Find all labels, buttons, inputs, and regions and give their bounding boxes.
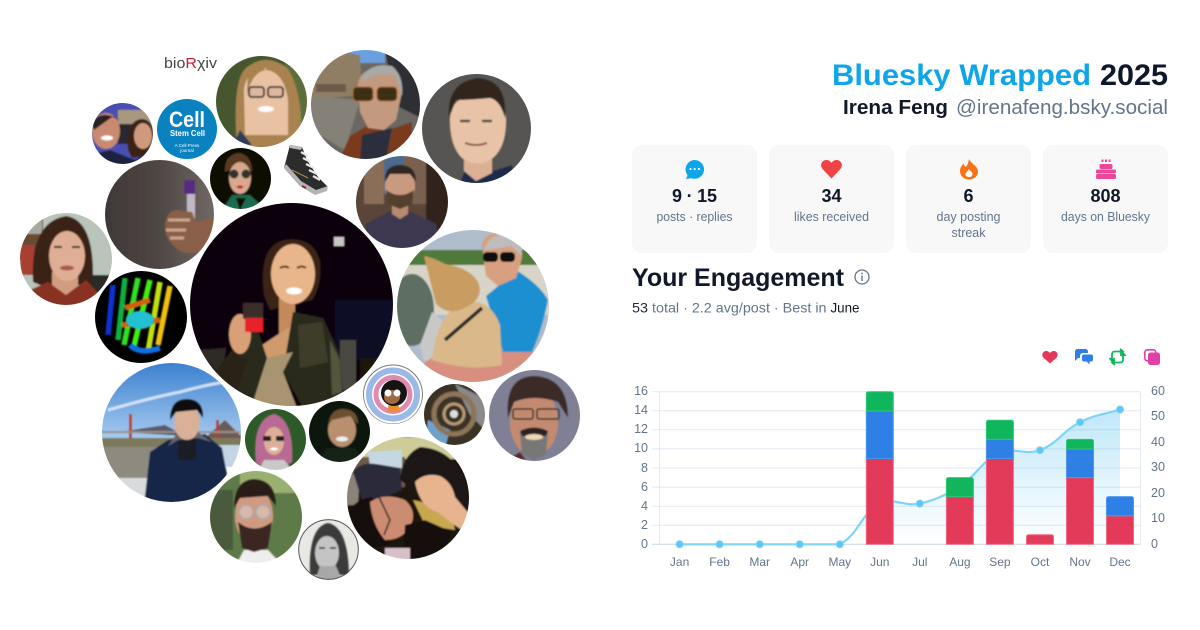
avatar: man with glasses and grey beard bbox=[489, 370, 580, 461]
avatar: man at Golden Gate Bridge bbox=[102, 363, 241, 502]
bar: November bbox=[1066, 439, 1094, 544]
avatar: main portrait with red drink bbox=[190, 203, 393, 406]
user name and handle bbox=[843, 97, 1168, 119]
avatar: woman with glasses bbox=[216, 56, 307, 147]
avatar: couple selfie bbox=[92, 103, 153, 164]
cumulative area fill bbox=[840, 410, 1120, 544]
icon: speech bubble bbox=[686, 160, 704, 179]
right axis labels: 60 bbox=[1151, 384, 1165, 398]
month labels: Sep bbox=[989, 555, 1011, 569]
right axis labels: 30 bbox=[1151, 460, 1165, 474]
left axis labels: 0 bbox=[641, 537, 648, 551]
avatar: Cell Stem Cell journal logo: journal bbox=[179, 148, 194, 153]
logo: bioRxiv: bioRχiv bbox=[164, 55, 218, 72]
month labels: Jun bbox=[870, 555, 889, 569]
heading: Your Engagement: Your Engagement bbox=[632, 264, 845, 292]
month labels bbox=[670, 555, 1131, 569]
stat card: posting streak: streak bbox=[952, 225, 986, 240]
icon: flame bbox=[960, 159, 978, 180]
month labels: May bbox=[828, 555, 851, 569]
right axis labels: 50 bbox=[1151, 409, 1165, 423]
stat card: likes received: 34 bbox=[821, 186, 842, 206]
right axis labels: 20 bbox=[1151, 486, 1165, 500]
icon: likes heart bbox=[1042, 351, 1058, 364]
left axis labels: 4 bbox=[641, 499, 648, 513]
month labels: Apr bbox=[790, 555, 809, 569]
stat card: days on Bluesky bbox=[1043, 145, 1168, 253]
engagement summary: total · 2.2 avg/post · Best in bbox=[652, 300, 826, 316]
stat card: posting streak: 6 bbox=[963, 186, 974, 206]
title: Bluesky Wrapped bbox=[832, 59, 1091, 92]
avatar: Cell Stem Cell journal logo: Stem Cell bbox=[170, 128, 205, 138]
avatar: man with clear glasses and beard bbox=[210, 471, 302, 563]
avatar: smiling woman in red top bbox=[20, 213, 112, 305]
month labels: Jul bbox=[912, 555, 927, 569]
month labels: Oct bbox=[1031, 555, 1050, 569]
month labels: Aug bbox=[949, 555, 971, 569]
avatar: high-top sneaker bbox=[284, 145, 328, 195]
month labels: Nov bbox=[1069, 555, 1091, 569]
stat card: likes received bbox=[769, 145, 894, 253]
avatar: man on grey background bbox=[422, 74, 531, 183]
user name and handle: @irenafeng.bsky.social bbox=[956, 97, 1168, 119]
right axis labels bbox=[1151, 384, 1165, 551]
stat card: posts and replies: posts · replies bbox=[656, 209, 733, 224]
avatar: Cell Stem Cell journal logo: Cell bbox=[169, 107, 205, 132]
left axis labels: 8 bbox=[641, 461, 648, 475]
left axis labels bbox=[634, 384, 648, 551]
stat card: likes received: likes received bbox=[794, 209, 869, 224]
avatar: woman with pink hair bbox=[245, 409, 306, 470]
avatar cluster bbox=[20, 50, 580, 580]
right axis labels: 0 bbox=[1151, 537, 1158, 551]
stat card: posts and replies: 9 · 15 bbox=[672, 186, 717, 206]
chart legend icons bbox=[1042, 349, 1160, 365]
left axis labels: 12 bbox=[634, 422, 648, 436]
avatar: man holding a dog bbox=[397, 230, 549, 382]
left axis labels: 2 bbox=[641, 518, 648, 532]
avatar: spiral staircase bbox=[424, 384, 485, 445]
title: 2025 bbox=[1100, 59, 1168, 92]
stat card: posts and replies bbox=[632, 145, 757, 253]
month labels: Dec bbox=[1109, 555, 1131, 569]
line points bbox=[676, 406, 1124, 548]
bar: June bbox=[866, 392, 893, 544]
stat card: posting streak: day posting bbox=[936, 209, 1000, 224]
month labels: Feb bbox=[709, 555, 730, 569]
engagement summary: June bbox=[830, 300, 860, 316]
bar: August bbox=[946, 478, 973, 544]
cumulative line bbox=[680, 410, 1120, 544]
stat card: days on Bluesky: days on Bluesky bbox=[1061, 209, 1150, 224]
avatar: black and white portrait bbox=[298, 519, 359, 580]
right axis labels: 40 bbox=[1151, 435, 1165, 449]
avatar: bearded man in patterned shirt bbox=[356, 156, 448, 248]
bar: December bbox=[1106, 497, 1134, 544]
gridlines and axes bbox=[652, 392, 1140, 544]
icon: replies speech bubbles bbox=[1075, 349, 1093, 364]
icon: birthday cake bbox=[1096, 160, 1116, 179]
avatar: man with amber sunglasses bbox=[311, 50, 420, 159]
engagement chart bbox=[634, 384, 1165, 569]
avatar: protein structure bbox=[95, 271, 187, 363]
month labels: Jan bbox=[670, 555, 689, 569]
month labels: Mar bbox=[749, 555, 770, 569]
bar: September bbox=[986, 420, 1013, 544]
avatar: Cell Stem Cell journal logo: A Cell Press bbox=[175, 143, 200, 148]
icon: reposts arrows bbox=[1110, 349, 1126, 365]
left axis labels: 6 bbox=[641, 480, 648, 494]
bar: October bbox=[1026, 535, 1054, 544]
left axis labels: 14 bbox=[634, 403, 648, 417]
avatar: hand holding a tube bbox=[105, 160, 214, 269]
avatar: smiling man on dark background bbox=[309, 401, 370, 462]
icon: heart bbox=[821, 160, 842, 178]
right axis labels: 10 bbox=[1151, 511, 1165, 525]
avatar: woman in green jacket and sunglasses bbox=[210, 148, 271, 209]
avatar: cartoon powerpuff girl badge bbox=[363, 364, 423, 424]
icon: info bbox=[855, 270, 869, 284]
avatar: person lying with black cat bbox=[347, 437, 469, 559]
stat card: posting streak bbox=[906, 145, 1031, 253]
engagement summary: 53 bbox=[632, 300, 648, 316]
avatar: Cell Stem Cell journal logo bbox=[157, 99, 217, 159]
user name and handle: Irena Feng bbox=[843, 97, 948, 119]
left axis labels: 10 bbox=[634, 441, 648, 455]
stacked bars bbox=[866, 392, 1134, 544]
stat card: days on Bluesky: 808 bbox=[1090, 186, 1121, 206]
icon: quotes squares bbox=[1145, 350, 1160, 365]
left axis labels: 16 bbox=[634, 384, 648, 398]
